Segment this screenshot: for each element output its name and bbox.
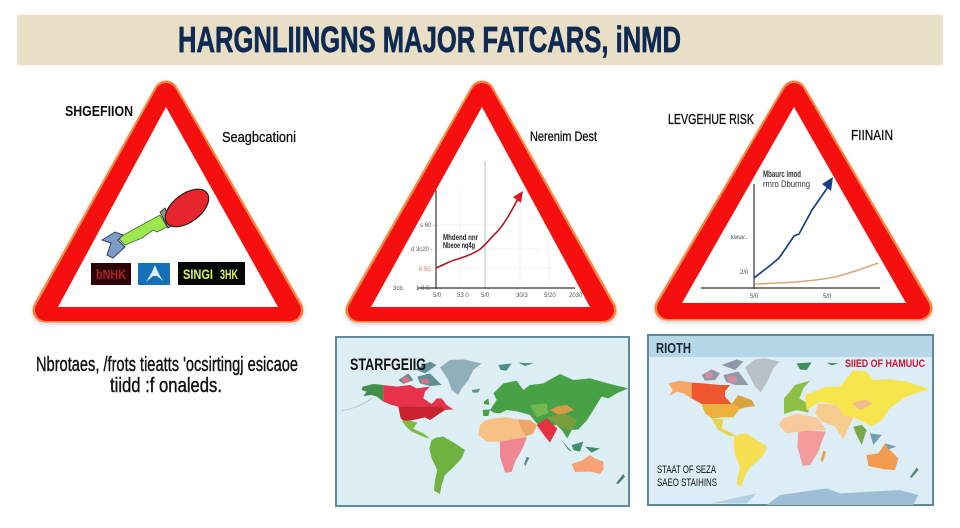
label: dark red badge: bNHK <box>96 266 126 282</box>
chart: blue rising line <box>701 169 880 300</box>
map header band <box>649 336 932 357</box>
text block: first triangle caption <box>36 354 298 397</box>
label: black badge <box>178 262 245 285</box>
panel: world map, strategic <box>336 337 629 506</box>
map bottom-left label: SAEO STAIHINS <box>657 477 717 489</box>
chart annotation: Mhdend nnr <box>443 233 478 242</box>
chart tick labels: d 3c20 - <box>411 247 433 253</box>
chart tick labels: 2/0 <box>740 270 749 276</box>
label: third triangle: FIINAIN <box>851 127 893 144</box>
chart tick labels: 53 0 <box>457 293 469 299</box>
title banner <box>17 15 943 65</box>
chart tick labels <box>393 223 583 299</box>
chart tick labels: s 60 - <box>420 223 435 229</box>
map header label: RIOTH <box>656 340 691 357</box>
map: continents <box>342 359 628 494</box>
chart tick labels: 2030 <box>569 293 583 299</box>
chart tick labels: 5/0 <box>823 294 832 300</box>
chart: red rising line <box>393 161 583 299</box>
chart annotation <box>763 169 810 189</box>
label: dark red badge <box>91 263 131 285</box>
title: HARGNLIINGNS MAJOR FATCARS, iNMD <box>178 19 681 60</box>
map bottom-left label: STAAT OF SEZA <box>657 464 716 476</box>
label: right of first triangle: Seagbcationi <box>222 129 296 146</box>
chart annotation <box>443 233 478 250</box>
label: black badge: SINGI <box>183 266 213 282</box>
label: top left: SHGEFIION <box>65 103 133 120</box>
text block: first triangle caption: tiidd :f onaleds. <box>110 375 222 397</box>
text block: first triangle caption: Nbrotaes, /frots tieatts 'ocsirtingj esicaoe <box>36 354 298 376</box>
icon: missile <box>102 182 215 258</box>
label: black badge: 3HK <box>220 266 238 282</box>
label: second triangle: Nerenim Dest <box>530 128 597 144</box>
chart tick labels: 6 50 <box>419 267 431 273</box>
panel: world map, health <box>648 335 933 505</box>
chart tick labels: 5/20 <box>544 293 556 299</box>
label: leverage risk: LEVGEHUE RISK <box>668 111 754 128</box>
chart tick labels: 5/0 <box>433 293 442 299</box>
panel: warning triangle with blue trend chart <box>667 93 920 310</box>
map bottom-left label <box>657 464 717 489</box>
chart annotation: Mbaurc lmod <box>763 169 801 179</box>
chart tick labels: 5/0 <box>481 293 490 299</box>
chart tick labels: 5/0 <box>750 294 759 300</box>
chart tick labels: 3cb. <box>393 286 405 292</box>
panel: warning triangle with missile <box>45 93 291 312</box>
panel: warning triangle with red trend chart <box>358 93 604 312</box>
map red label: SIIED OF HAMUUC <box>845 358 925 370</box>
chart annotation: rmro Dbumng <box>763 179 810 189</box>
chart tick labels: 1 0 S <box>416 286 430 292</box>
chart annotation: Nbeoe nq4g <box>443 241 475 250</box>
chart tick labels: 30/3 <box>516 293 528 299</box>
chart tick labels: kwuv.. <box>731 235 748 241</box>
map label: STARFGEIIG <box>350 355 426 374</box>
label: blue badge <box>138 263 170 285</box>
chart tick labels <box>731 235 832 300</box>
map: continents <box>668 358 929 505</box>
